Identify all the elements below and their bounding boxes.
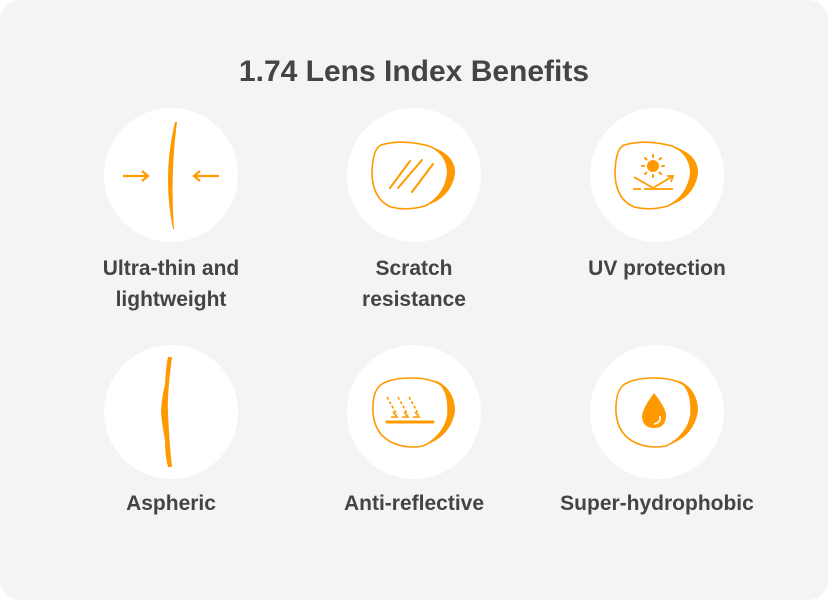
label: UV: UV protection: [588, 257, 726, 280]
icon: anti-reflective: [347, 345, 481, 479]
label: anti-reflective: Anti-reflective: [344, 492, 484, 515]
label: ultra-thin: Ultra-thin and: [103, 257, 239, 280]
title: 1.74 Lens Index Benefits: [239, 55, 589, 88]
label: scratch: Scratch: [375, 257, 453, 280]
label: scratch: [362, 257, 466, 311]
icon: scratch resistance: [347, 108, 481, 242]
icon: super-hydrophobic: [590, 345, 724, 479]
label: super-hydrophobic: Super-hydrophobic: [560, 492, 754, 515]
label: ultra-thin: [103, 257, 239, 311]
label: ultra-thin: lightweight: [116, 288, 226, 311]
label: aspheric: Aspheric: [126, 492, 216, 515]
icon: ultra-thin lens with arrows: [104, 108, 238, 242]
icon: UV protection: [590, 108, 724, 242]
icon: aspheric lens: [104, 345, 238, 479]
label: scratch: resistance: [362, 288, 466, 311]
